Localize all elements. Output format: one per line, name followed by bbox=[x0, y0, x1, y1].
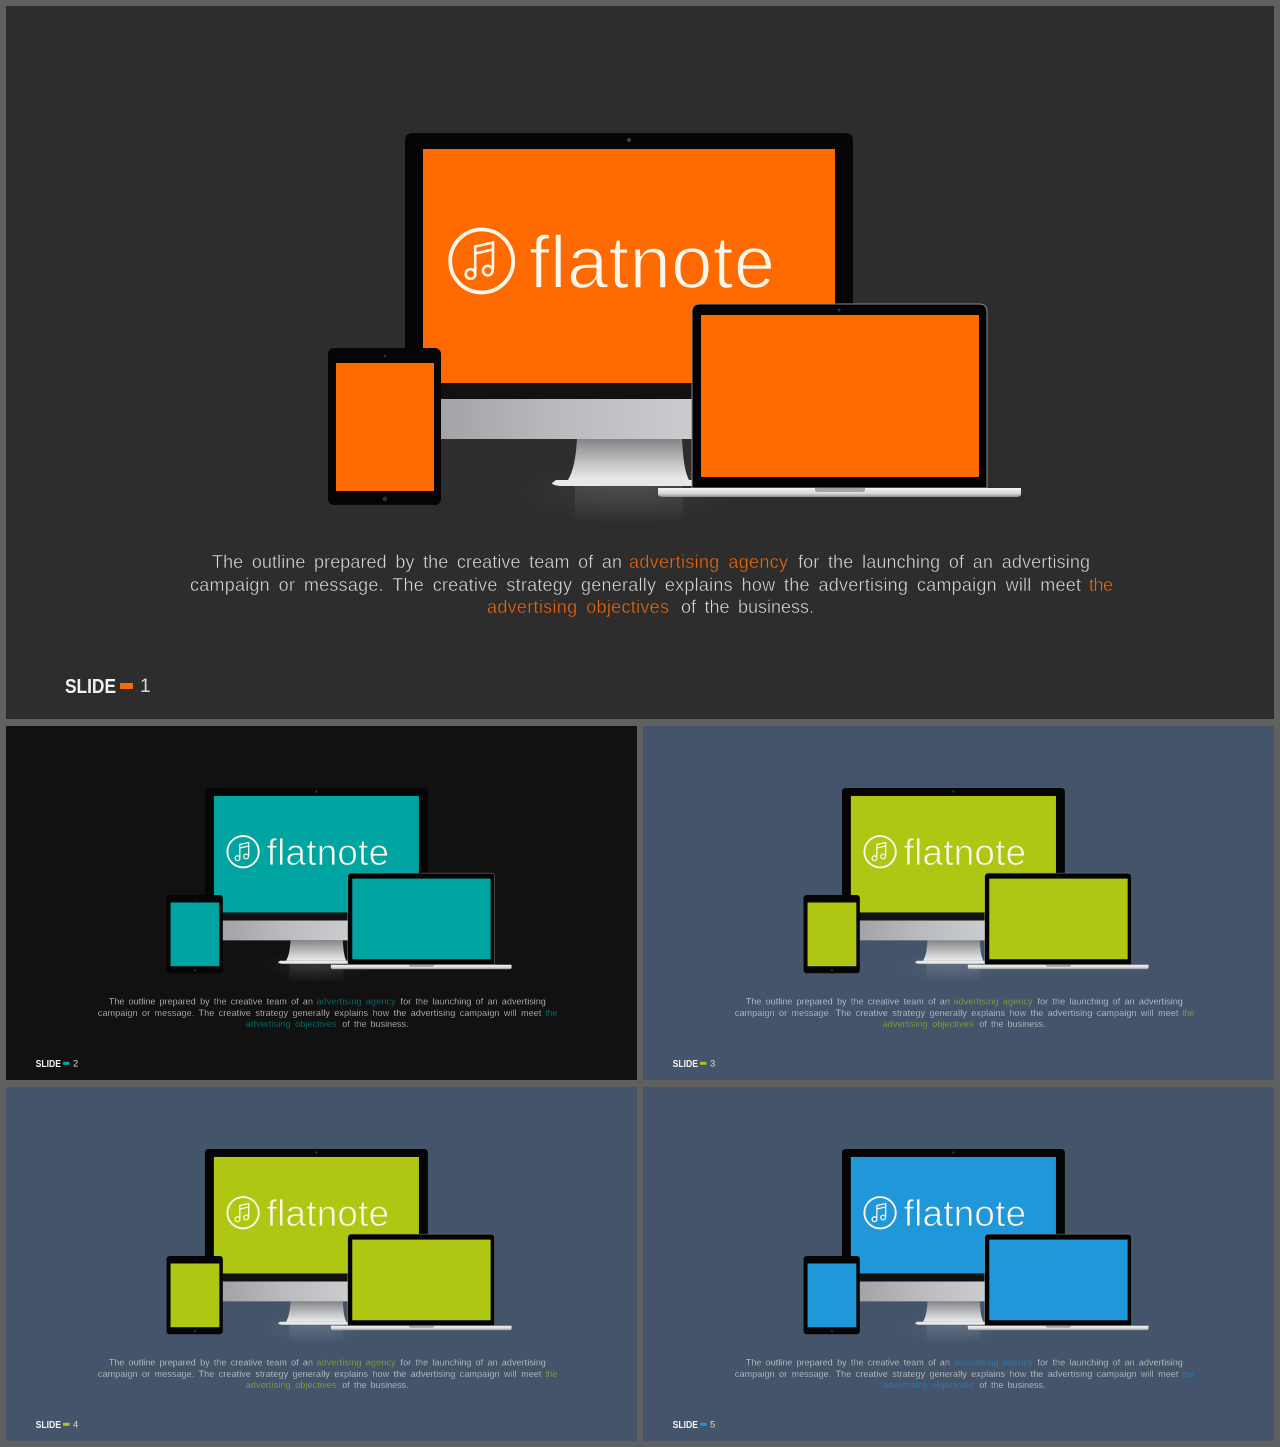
slide 2 description: advertising agency bbox=[316, 997, 396, 1007]
logo: flatnote: flatnote bbox=[904, 1193, 1026, 1234]
slide 2 label: SLIDE bbox=[36, 1059, 61, 1070]
slide 1 description: The outline prepared by the creative team of an bbox=[212, 552, 622, 572]
slide 4 description: the bbox=[545, 1369, 557, 1379]
slide 3 description: advertising objectives bbox=[883, 1019, 974, 1029]
slide 5 panel bbox=[643, 1087, 1274, 1441]
icon: laptop bbox=[658, 304, 1021, 497]
slide 2 description: of the business. bbox=[342, 1019, 409, 1029]
slide 4 label: SLIDE bbox=[36, 1420, 61, 1431]
slide 4 description: campaign or message. The creative strategy generally explains how the advertising campaign will meet bbox=[98, 1369, 542, 1379]
slide 1 background bbox=[6, 6, 1274, 719]
slide 3 label bbox=[673, 1058, 715, 1070]
slide 4 label: 4 bbox=[73, 1419, 78, 1430]
slide 4 label bbox=[36, 1419, 78, 1431]
icon: laptop bbox=[331, 1234, 512, 1330]
slide 2 description: for the launching of an advertising bbox=[401, 997, 546, 1007]
slide 2 panel bbox=[6, 726, 637, 1080]
slide 3 label: 3 bbox=[710, 1058, 715, 1069]
slide 4 description: of the business. bbox=[342, 1380, 409, 1390]
slide 5 background bbox=[643, 1087, 1274, 1441]
logo: flatnote: flatnote bbox=[267, 1193, 389, 1234]
slide 3 device mockup bbox=[804, 788, 1149, 983]
slide 2 description: the bbox=[545, 1008, 557, 1018]
slide 5 description: The outline prepared by the creative team of an bbox=[746, 1358, 950, 1368]
slide 3 panel bbox=[643, 726, 1274, 1080]
logo: flatnote: flatnote bbox=[267, 832, 389, 873]
slide 4 device mockup bbox=[167, 1149, 512, 1344]
slide 3 description: campaign or message. The creative strategy generally explains how the advertising campaign will meet bbox=[735, 1008, 1179, 1018]
icon: desktop monitor bbox=[842, 788, 1065, 983]
slide 5 description: advertising agency bbox=[953, 1358, 1033, 1368]
slide 4 description: advertising agency bbox=[316, 1358, 396, 1368]
slide 1 device mockup bbox=[328, 133, 1021, 524]
icon: desktop monitor bbox=[405, 133, 853, 524]
slide 2 label bbox=[36, 1058, 78, 1070]
icon: desktop monitor bbox=[205, 788, 428, 983]
slide 1 label: 1 bbox=[140, 676, 151, 697]
icon: desktop monitor bbox=[205, 1149, 428, 1344]
slide 3 description: of the business. bbox=[979, 1019, 1046, 1029]
icon: tablet bbox=[804, 895, 860, 973]
slide 2 description: campaign or message. The creative strategy generally explains how the advertising campaign will meet bbox=[98, 1008, 542, 1018]
icon: laptop bbox=[968, 873, 1149, 969]
slide 4 description: advertising objectives bbox=[246, 1380, 337, 1390]
icon: laptop bbox=[331, 873, 512, 969]
slide 3 label: SLIDE bbox=[673, 1059, 698, 1070]
slide 3 description: The outline prepared by the creative team of an bbox=[746, 997, 950, 1007]
slide 2 description: advertising objectives bbox=[246, 1019, 337, 1029]
icon: desktop monitor bbox=[842, 1149, 1065, 1344]
slide 5 description: the bbox=[1182, 1369, 1194, 1379]
slide 1 panel bbox=[6, 6, 1274, 719]
slide 2 device mockup bbox=[167, 788, 512, 983]
slide 3 description: the bbox=[1182, 1008, 1194, 1018]
slide 5 description: advertising objectives bbox=[883, 1380, 974, 1390]
slide 1 label bbox=[65, 676, 151, 698]
slide 1 description: advertising agency bbox=[629, 552, 788, 572]
slide 1 description: of the business. bbox=[681, 597, 814, 617]
slide 5 description bbox=[735, 1358, 1194, 1390]
slide 1 description: advertising objectives bbox=[487, 597, 669, 617]
icon: tablet bbox=[167, 1256, 223, 1334]
slide 1 description: the bbox=[1089, 575, 1113, 595]
icon: laptop bbox=[968, 1234, 1149, 1330]
slide 5 label bbox=[673, 1419, 715, 1431]
logo: flatnote: flatnote bbox=[529, 221, 775, 304]
slide 3 description: advertising agency bbox=[953, 997, 1033, 1007]
slide 4 description: The outline prepared by the creative team of an bbox=[109, 1358, 313, 1368]
slide 5 description: campaign or message. The creative strategy generally explains how the advertising campaign will meet bbox=[735, 1369, 1179, 1379]
slide 5 label: SLIDE bbox=[673, 1420, 698, 1431]
slide 1 description: campaign or message. The creative strategy generally explains how the advertising campaign will meet bbox=[190, 575, 1081, 595]
slide 2 label: 2 bbox=[73, 1058, 78, 1069]
logo: flatnote: flatnote bbox=[904, 832, 1026, 873]
slide 5 description: of the business. bbox=[979, 1380, 1046, 1390]
slide 2 description: The outline prepared by the creative team of an bbox=[109, 997, 313, 1007]
slide 3 background bbox=[643, 726, 1274, 1080]
slide 5 device mockup bbox=[804, 1149, 1149, 1344]
icon: tablet bbox=[804, 1256, 860, 1334]
slide 4 description bbox=[98, 1358, 557, 1390]
slide 3 description bbox=[735, 997, 1194, 1029]
slide 5 label: 5 bbox=[710, 1419, 715, 1430]
icon: tablet bbox=[167, 895, 223, 973]
slide 1 label: SLIDE bbox=[65, 676, 116, 698]
slide 5 description: for the launching of an advertising bbox=[1038, 1358, 1183, 1368]
slide 4 background bbox=[6, 1087, 637, 1441]
slide 4 description: for the launching of an advertising bbox=[401, 1358, 546, 1368]
slide 4 panel bbox=[6, 1087, 637, 1441]
slide 1 description bbox=[190, 552, 1113, 617]
slide 2 description bbox=[98, 997, 557, 1029]
icon: tablet bbox=[328, 348, 441, 505]
slide 2 background bbox=[6, 726, 637, 1080]
slide 3 description: for the launching of an advertising bbox=[1038, 997, 1183, 1007]
slide 1 description: for the launching of an advertising bbox=[798, 552, 1090, 572]
